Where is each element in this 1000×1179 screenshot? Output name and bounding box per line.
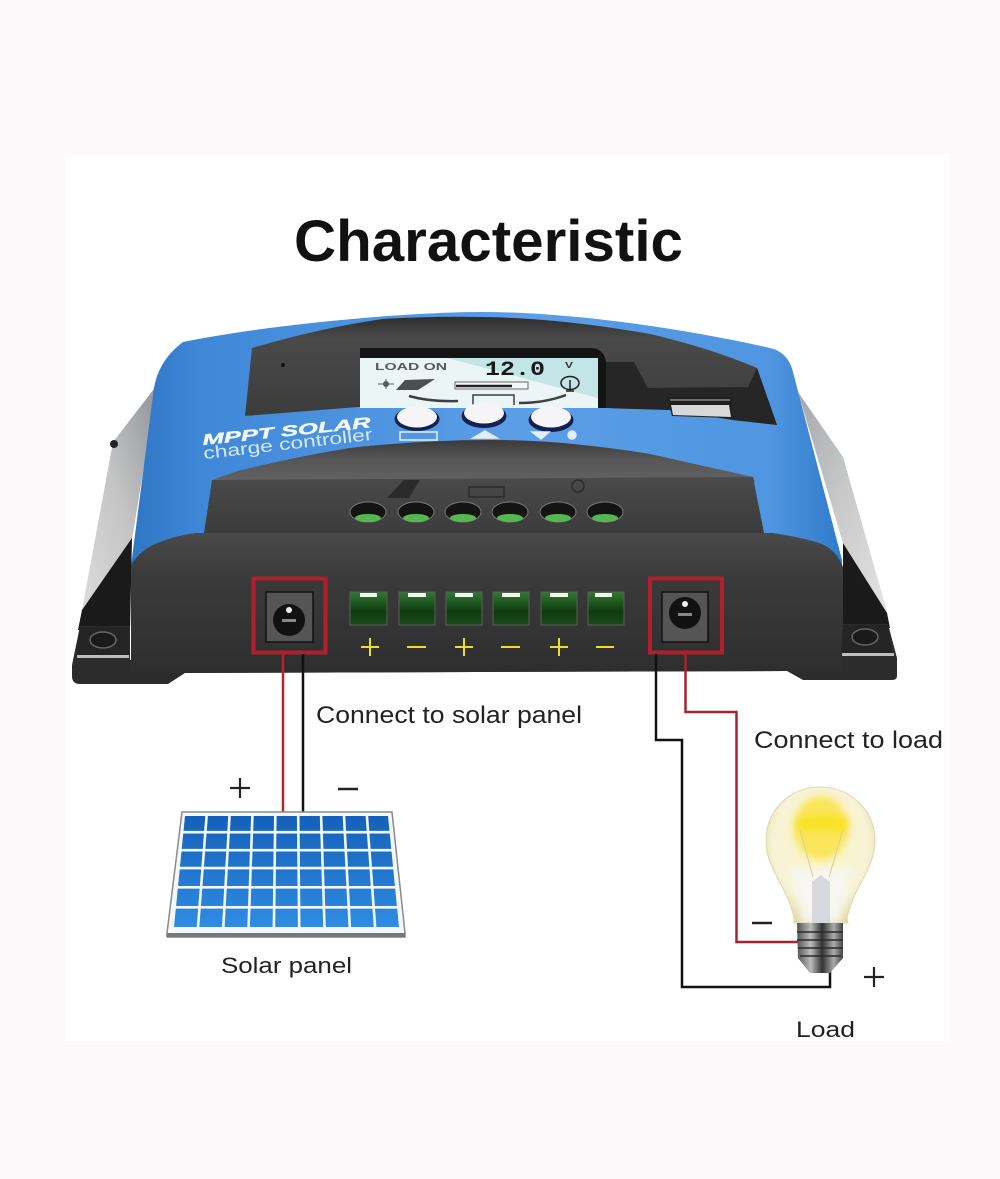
cell array — [174, 816, 399, 927]
menu buttons — [394, 402, 574, 432]
front face — [131, 533, 843, 673]
blue top shell — [131, 312, 842, 590]
left side screw — [110, 440, 118, 448]
solar panel polarity minus — [338, 788, 358, 790]
LCD unit: V — [565, 361, 574, 370]
base flange — [72, 624, 897, 684]
screw threads — [797, 932, 843, 956]
terminal screw holes — [350, 502, 623, 522]
bright filament band — [796, 816, 848, 832]
left red highlight box — [254, 578, 326, 652]
right red highlight box — [650, 578, 722, 652]
label: connect to solar panel: Connect to solar panel — [316, 702, 582, 729]
light bulb illustration — [766, 787, 875, 973]
black USB recess — [606, 362, 777, 425]
LCD battery bar — [455, 382, 528, 389]
yellow glow — [794, 796, 848, 860]
brand label: MPPT SOLAR — [202, 414, 372, 449]
upper dark display recess — [245, 317, 777, 425]
LCD text LOAD ON: LOAD ON — [375, 361, 447, 373]
filament stem — [812, 875, 830, 923]
solar panel polarity plus — [230, 778, 250, 798]
left mounting hole — [76, 627, 129, 658]
wires to solar panel — [283, 654, 303, 812]
solar charge controller device — [72, 312, 897, 684]
LCD bezel — [360, 348, 606, 408]
left silver side wing — [82, 385, 157, 610]
brand sublabel: charge controller — [202, 425, 374, 463]
cell grid — [175, 816, 398, 927]
lower panel sloped top — [212, 440, 755, 482]
LCD flow arrows and battery — [409, 395, 566, 405]
button icons — [400, 431, 576, 440]
right DC jack — [662, 592, 708, 642]
blue strip below LCD — [235, 408, 777, 480]
lower panel front — [204, 477, 764, 533]
green terminal blocks — [350, 592, 624, 625]
LCD screen — [360, 358, 598, 408]
small indicator dot — [281, 363, 285, 367]
terminal polarity marks — [361, 638, 614, 656]
left DC jack — [266, 592, 313, 642]
frame bottom edge — [167, 933, 405, 937]
bulb glass — [766, 787, 875, 923]
panel frame — [167, 812, 405, 937]
left black foot wedge — [78, 538, 132, 630]
white panel — [65, 155, 949, 1041]
panel icons above terminals — [387, 480, 584, 498]
glass lower highlight — [788, 868, 854, 923]
LCD solar icon — [378, 379, 435, 390]
wires to load — [656, 654, 830, 987]
title: Characteristic — [294, 209, 683, 274]
right black foot wedge — [843, 543, 890, 628]
LCD bulb icon — [561, 376, 579, 391]
load polarity minus — [752, 922, 772, 924]
green screw heads — [355, 514, 618, 522]
right silver side wing — [798, 392, 888, 615]
label: connect to load: Connect to load — [754, 727, 943, 754]
label: load: Load — [796, 1017, 855, 1042]
USB port — [667, 397, 732, 418]
filament wires — [800, 830, 843, 877]
solar panel illustration — [167, 812, 405, 937]
terminal contacts — [360, 593, 612, 597]
right mounting hole — [841, 625, 894, 656]
label: solar panel: Solar panel — [221, 953, 352, 978]
LCD voltage reading: 12.0 — [485, 359, 545, 382]
screw base — [797, 923, 843, 973]
load polarity plus — [864, 967, 884, 987]
